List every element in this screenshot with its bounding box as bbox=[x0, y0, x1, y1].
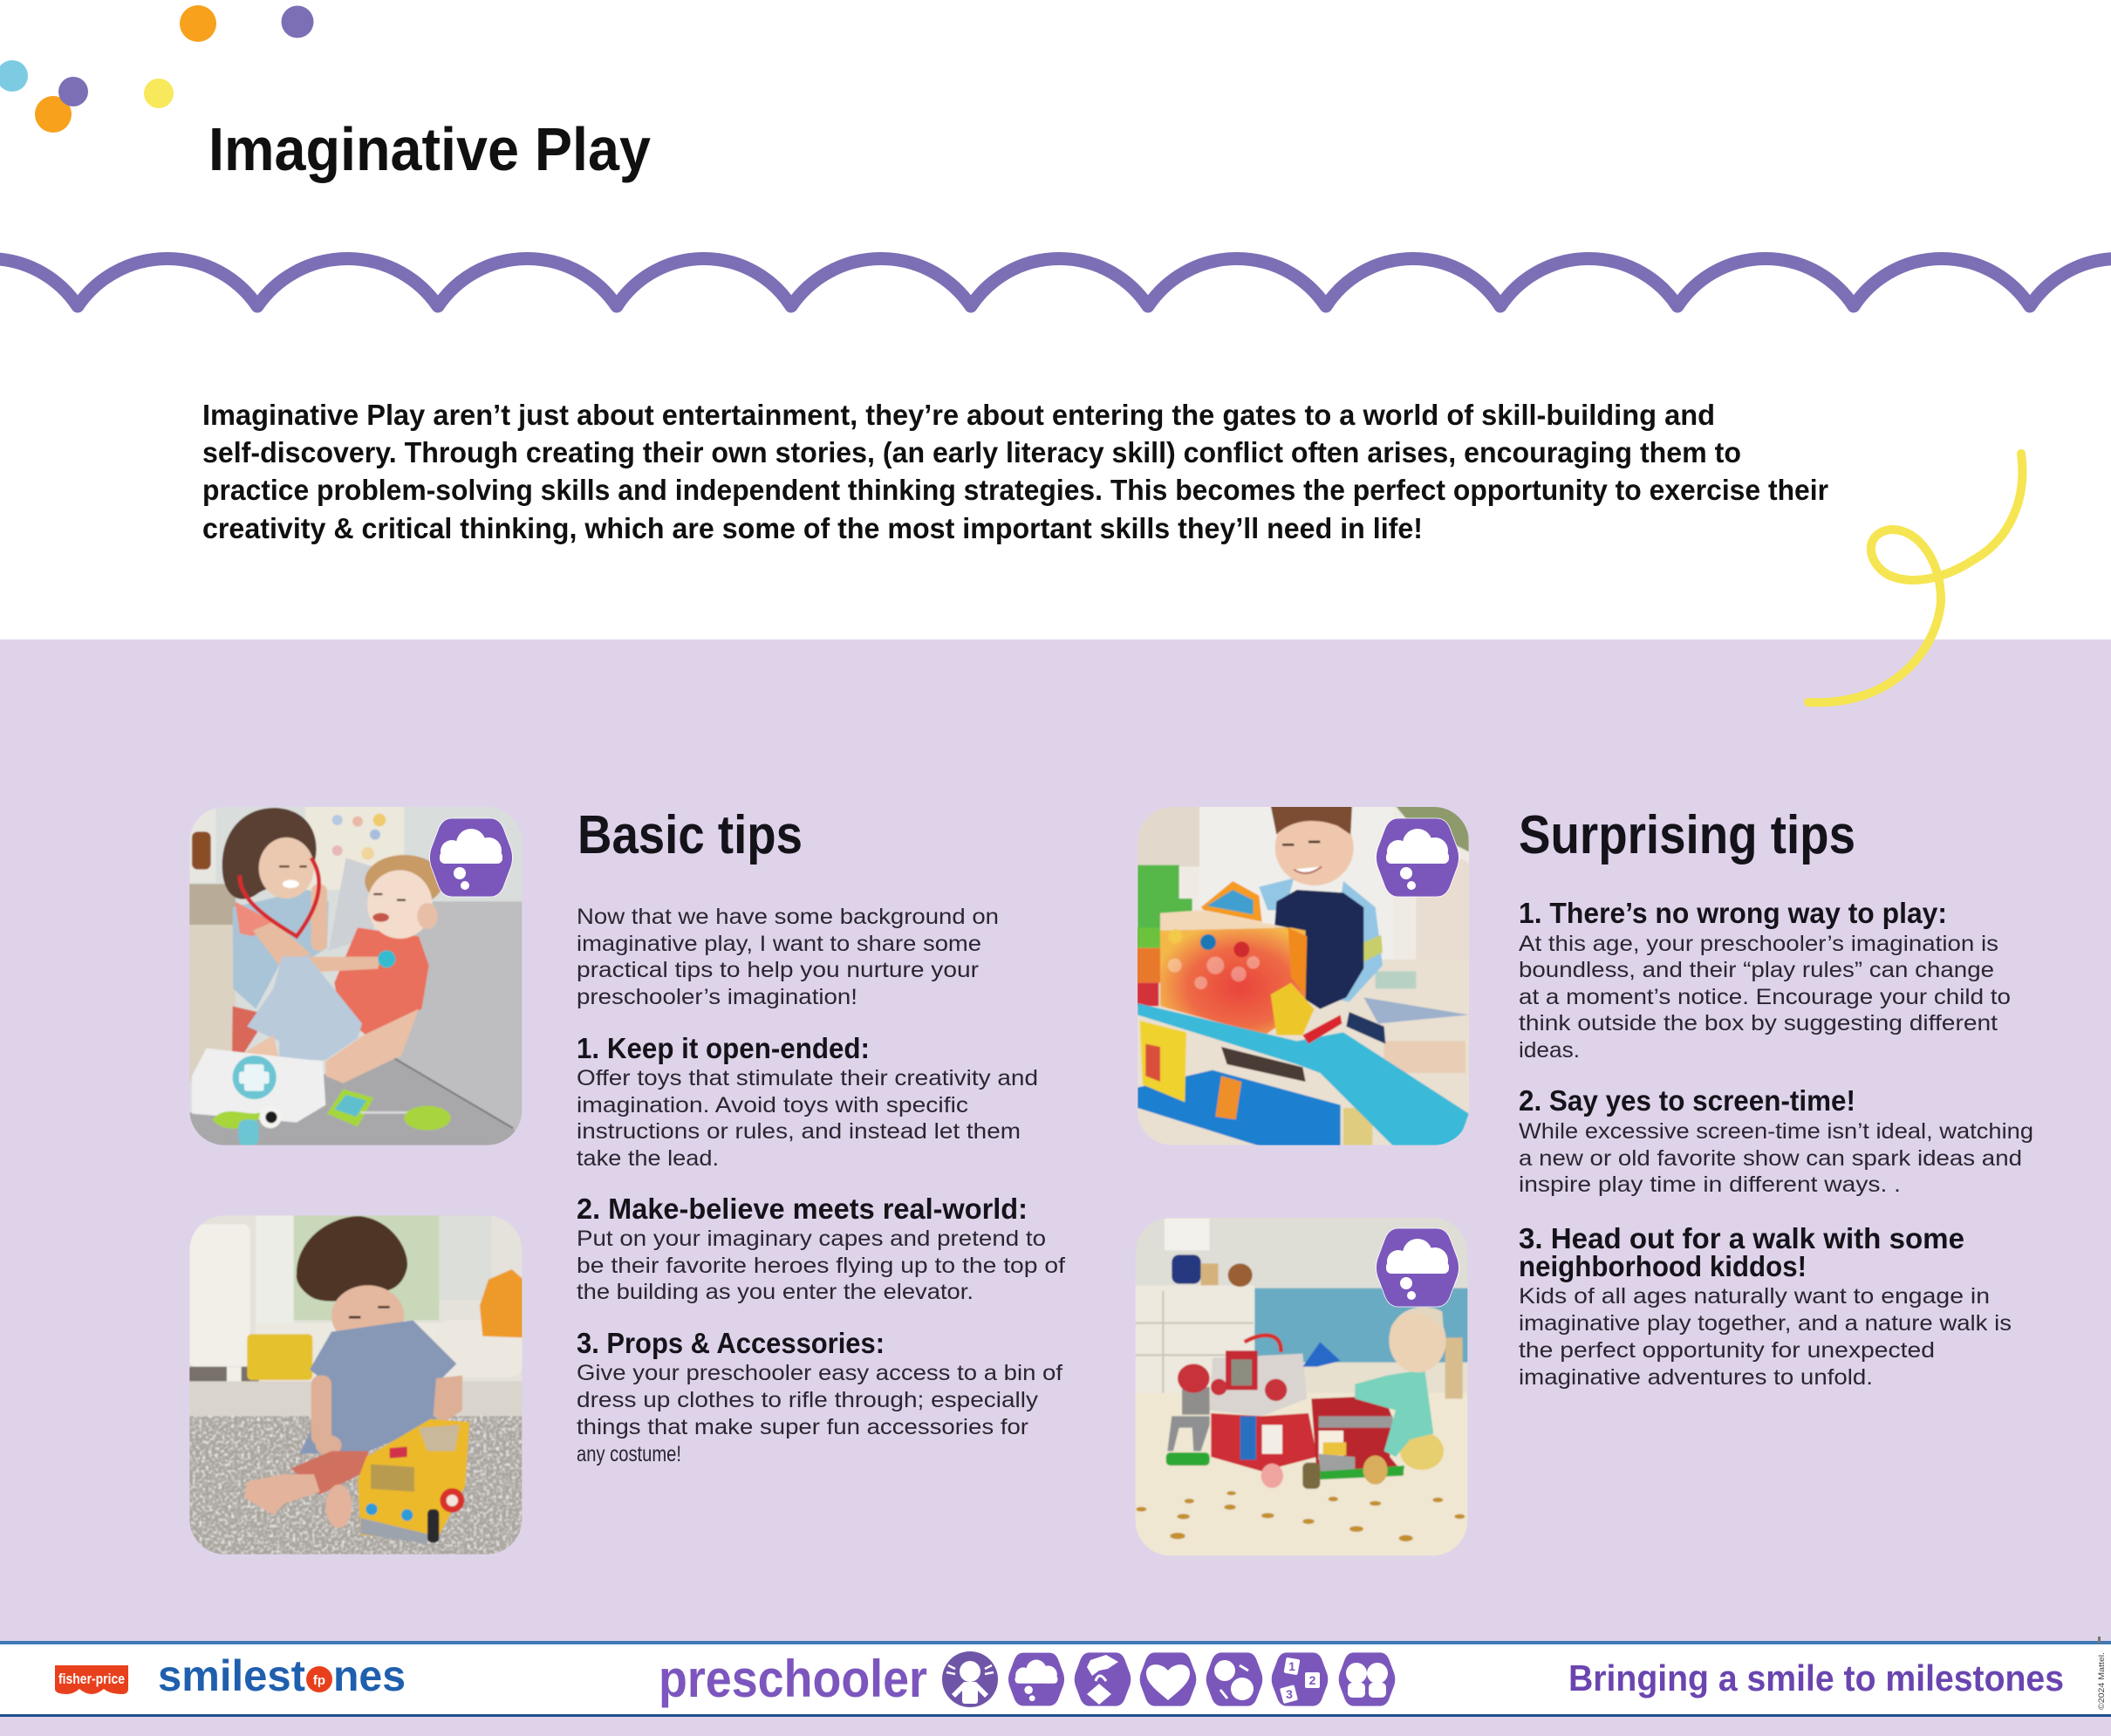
intro paragraph: practice problem-solving skills and independent thinking strategies. This becomes the perfect opportunity to exercise their bbox=[202, 474, 1828, 506]
copyright: ©2024 Mattel. bbox=[2097, 1652, 2106, 1710]
footer band bbox=[0, 1637, 2111, 1717]
logo: smilestones: nes bbox=[333, 1651, 406, 1700]
surprising tip 3: imaginative adventures to unfold. bbox=[1519, 1365, 1873, 1390]
surprising tip 3 bbox=[1519, 1222, 2012, 1390]
label: preschooler: preschooler bbox=[659, 1650, 927, 1708]
basic tip 3: Give your preschooler easy access to a bin of bbox=[577, 1361, 1062, 1385]
surprising tip 2 bbox=[1519, 1084, 2033, 1197]
logo: smilestones: smilest bbox=[158, 1651, 305, 1700]
yellow curly ribbon bbox=[1808, 454, 2022, 702]
surprising tip 2: inspire play time in different ways. . bbox=[1519, 1172, 1901, 1197]
surprising tip 1: 1. There’s no wrong way to play: bbox=[1519, 897, 1947, 929]
surprising tip 1: at a moment’s notice. Encourage your child to bbox=[1519, 985, 2011, 1009]
basic tip 3: dress up clothes to rifle through; especially bbox=[577, 1388, 1039, 1412]
basic tip 1: Offer toys that stimulate their creativity and bbox=[577, 1066, 1038, 1090]
intro paragraph bbox=[202, 399, 1828, 544]
intro paragraph: self-discovery. Through creating their own stories, (an early literacy skill) conflict often arises, encouraging them to bbox=[202, 436, 1741, 468]
surprising tip 2: While excessive screen-time isn’t ideal, watching bbox=[1519, 1119, 2033, 1144]
surprising tip 3: 3. Head out for a walk with some bbox=[1519, 1222, 1964, 1254]
surprising tip 3: Kids of all ages naturally want to engage in bbox=[1519, 1284, 1990, 1309]
panel: lavender tips section bbox=[0, 639, 2111, 1736]
basic tip 3: 3. Props & Accessories: bbox=[577, 1327, 885, 1359]
icon: number blocks: 1 bbox=[1288, 1659, 1295, 1673]
text block: basic tips intro bbox=[577, 905, 999, 1009]
photo: boy with car wash toy bbox=[1134, 803, 1474, 1149]
logo: smilestones: fp bbox=[313, 1673, 325, 1688]
surprising tip 1: ideas. bbox=[1519, 1038, 1580, 1063]
badge: imagination cloud bbox=[429, 818, 512, 897]
icon: number blocks: 2 bbox=[1309, 1673, 1316, 1687]
badge: imagination cloud bbox=[1376, 818, 1459, 897]
surprising tip 1: At this age, your preschooler’s imagination is bbox=[1519, 932, 1998, 956]
logo: fisher-price: fisher-price bbox=[58, 1671, 125, 1687]
basic tip 2 bbox=[577, 1193, 1065, 1304]
intro paragraph: Imaginative Play aren’t just about entertainment, they’re about entering the gates to a world of skill-building and bbox=[202, 399, 1715, 431]
basic tip 1: take the lead. bbox=[577, 1146, 719, 1171]
surprising tip 2: 2. Say yes to screen-time! bbox=[1519, 1084, 1855, 1117]
photo: toddler with yellow school bus bbox=[186, 1213, 526, 1559]
scalloped divider bbox=[0, 258, 2111, 306]
heading: Surprising tips: Surprising tips bbox=[1519, 805, 1855, 865]
surprising tip 1 bbox=[1519, 897, 2011, 1063]
logo: smilestones bbox=[158, 1651, 406, 1700]
basic tip 2: the building as you enter the elevator. bbox=[577, 1280, 974, 1304]
basic tip 2: Put on your imaginary capes and pretend to bbox=[577, 1227, 1046, 1251]
icon: child bbox=[942, 1651, 998, 1707]
basic tip 2: be their favorite heroes flying up to the top of bbox=[577, 1254, 1065, 1278]
text block: basic tips intro: preschooler’s imagination! bbox=[577, 985, 857, 1009]
basic tip 3: things that make super fun accessories for bbox=[577, 1415, 1028, 1439]
photo: baby with farm playset bbox=[1131, 1213, 1472, 1559]
basic tip 1: 1. Keep it open-ended: bbox=[577, 1032, 870, 1064]
basic tip 1: imagination. Avoid toys with specific bbox=[577, 1093, 968, 1117]
photo: girl playing doctor with boy on sofa bbox=[186, 803, 526, 1149]
icon: two children talking bbox=[1206, 1652, 1262, 1706]
text block: basic tips intro: practical tips to help you nurture your bbox=[577, 958, 979, 982]
text block: basic tips intro: Now that we have some background on bbox=[577, 905, 999, 929]
icon: number blocks bbox=[1272, 1652, 1328, 1706]
title: Imaginative Play bbox=[208, 115, 651, 183]
heading: Basic tips: Basic tips bbox=[577, 805, 803, 865]
surprising tip 3: neighborhood kiddos! bbox=[1519, 1250, 1807, 1282]
milestone icon row bbox=[942, 1651, 1395, 1707]
surprising tip 3: the perfect opportunity for unexpected bbox=[1519, 1338, 1935, 1363]
basic tip 1: instructions or rules, and instead let them bbox=[577, 1119, 1021, 1144]
surprising tip 1: think outside the box by suggesting different bbox=[1519, 1011, 1998, 1035]
icon: number blocks: 3 bbox=[1286, 1687, 1293, 1701]
intro paragraph: creativity & critical thinking, which are some of the most important skills they’ll need in life! bbox=[202, 512, 1423, 544]
icon: two friends bbox=[1339, 1652, 1395, 1706]
basic tip 3: any costume! bbox=[577, 1442, 681, 1466]
surprising tip 1: boundless, and their “play rules” can change bbox=[1519, 958, 1994, 982]
decorative confetti dots bbox=[0, 5, 314, 133]
text block: basic tips intro: imaginative play, I want to share some bbox=[577, 932, 981, 956]
surprising tip 2: a new or old favorite show can spark ideas and bbox=[1519, 1146, 2022, 1171]
basic tip 2: 2. Make-believe meets real-world: bbox=[577, 1193, 1028, 1225]
tagline: Bringing a smile to milestones bbox=[1568, 1657, 2064, 1698]
basic tip 1 bbox=[577, 1032, 1038, 1171]
logo: fisher-price bbox=[55, 1665, 128, 1694]
icon: thought cloud bbox=[1008, 1652, 1064, 1706]
surprising tip 3: imaginative play together, and a nature walk is bbox=[1519, 1311, 2012, 1336]
basic tip 3 bbox=[577, 1327, 1062, 1466]
icon: heart bbox=[1140, 1652, 1196, 1706]
badge: imagination cloud bbox=[1376, 1228, 1459, 1307]
icon: movement bbox=[1075, 1652, 1131, 1706]
